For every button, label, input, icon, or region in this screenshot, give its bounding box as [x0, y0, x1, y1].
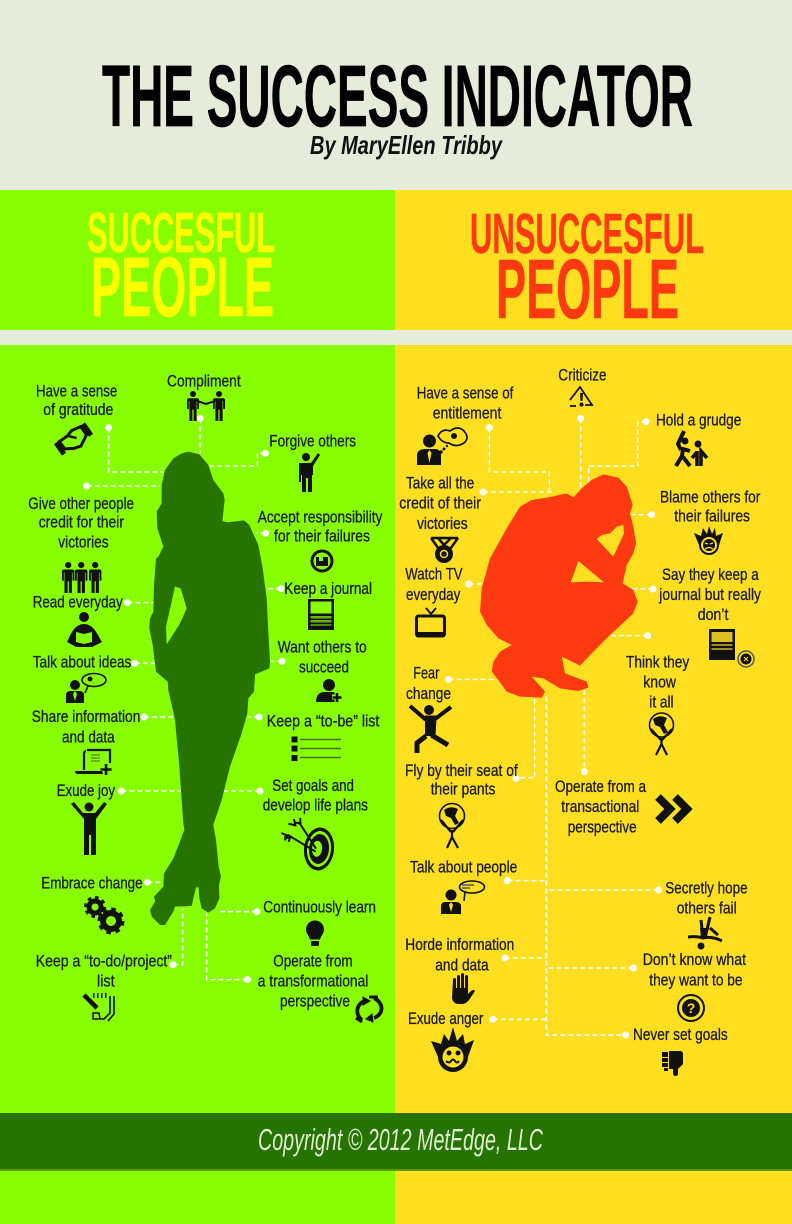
byline: By MaryEllen Tribby — [310, 130, 503, 160]
text: watch tv everyday: everyday — [406, 586, 461, 604]
text: think they know it all: it all — [649, 694, 674, 712]
text: want others to succeed — [278, 638, 367, 676]
text: embrace change: Embrace change — [41, 874, 143, 892]
text: take all the credit: credit of their — [399, 495, 481, 513]
text: watch tv everyday: Watch TV — [405, 565, 463, 583]
text: share information and data: and data — [62, 728, 115, 746]
text: continuously learn: Continuously learn — [263, 899, 376, 917]
text: share information and data: Share information — [32, 708, 140, 726]
icon: notepad with pencil — [84, 993, 114, 1021]
text: operate from a transformational perspective: Operate from — [273, 953, 353, 971]
text: blame others: their failures — [674, 508, 750, 526]
icon: three people — [62, 562, 101, 593]
labels: unsuccessful side — [399, 367, 762, 1044]
text: accept responsibility — [258, 509, 383, 546]
heading: successful people: SUCCESFUL — [87, 201, 275, 265]
text: accept responsibility: for their failures — [274, 528, 370, 546]
text: share information and data — [32, 708, 140, 746]
text: have a sense of entitlement — [417, 384, 514, 422]
text: fear change: Fear — [413, 665, 440, 683]
icon: person talking — [441, 881, 484, 914]
text: never set goals: Never set goals — [633, 1026, 728, 1044]
text: don't know what they want to be: they want to be — [649, 971, 743, 989]
text: think they know it all — [626, 653, 690, 712]
footer copyright text: Copyright © 2012 MetEdge, LLC — [258, 1122, 543, 1157]
header panel — [0, 0, 792, 190]
connectors: successful side — [83, 415, 285, 983]
text: have a sense of entitlement: Have a sense of — [417, 384, 514, 402]
icon: medal — [431, 538, 458, 563]
icon: thinking person — [417, 428, 467, 465]
text: give other people credit: victories — [58, 534, 109, 552]
icon: falling person — [688, 917, 722, 950]
icon: angry face — [694, 526, 723, 555]
text: exude anger: Exude anger — [408, 1010, 484, 1028]
text: don't know what they want to be: Don’t know what — [643, 951, 746, 969]
text: forgive others: Forgive others — [269, 433, 356, 451]
footer band — [0, 1113, 792, 1171]
panel: successful people heading background — [0, 190, 395, 330]
text: criticize: Criticize — [558, 367, 607, 385]
silhouette: standing woman — [149, 452, 270, 925]
text: fly by their seat — [405, 762, 518, 798]
text: operate from a transformational perspective: perspective — [280, 993, 350, 1011]
icon: journal — [308, 599, 334, 630]
icon: person with idea — [66, 674, 106, 703]
icon: angry face large — [431, 1027, 474, 1072]
text: operate from a transformational perspective: a transformational — [258, 973, 368, 991]
heading: successful people: PEOPLE — [91, 240, 274, 334]
icon: refresh cycle — [356, 997, 382, 1022]
text: watch tv everyday — [405, 565, 463, 604]
labels: successful side — [28, 373, 383, 1011]
text: keep a to-do/project list: Keep a “to-do/project” — [36, 953, 172, 971]
icon: warning triangle — [570, 387, 592, 406]
text: give other people credit: credit for their — [39, 514, 124, 532]
text: fly by their seat: Fly by their seat of — [405, 762, 518, 780]
icon: atlas holding globe — [650, 713, 674, 755]
icon: add person — [316, 679, 342, 702]
text: give other people credit — [28, 495, 134, 552]
text: keep a to-be list: Keep a “to-be” list — [267, 713, 380, 731]
text: think they know it all: know — [643, 673, 676, 691]
icon: scroll with plus — [75, 750, 112, 775]
text: secretly hope others fail: others fail — [677, 899, 737, 917]
heading: successful people — [87, 201, 275, 334]
icon: person pointing — [299, 453, 320, 492]
connectors: unsuccessful side — [445, 415, 662, 1038]
icon: atlas holding globe 2 — [440, 804, 464, 848]
text: blame others: Blame others for — [660, 488, 761, 506]
text: think they know it all: Think they — [626, 653, 690, 671]
panel: successful people body — [0, 345, 395, 1224]
text: fear change: change — [406, 685, 451, 703]
icon: target with arrows — [278, 816, 337, 872]
text: say they keep a journal — [658, 566, 762, 624]
text: have a sense of gratitude: of gratitude — [43, 401, 113, 419]
text: read everyday: Read everyday — [33, 593, 123, 611]
icon: handshake — [53, 422, 95, 458]
text: fly by their seat: their pants — [431, 780, 495, 798]
text: horde information and data: Horde information — [405, 936, 514, 954]
icon: open hand — [452, 973, 475, 1004]
icon: person reading — [67, 612, 102, 647]
text: say they keep a journal: journal but really — [658, 586, 762, 604]
silhouette: crouching man — [480, 474, 638, 698]
text: say they keep a journal: Say they keep a — [662, 566, 759, 584]
text: hold a grudge: Hold a grudge — [656, 411, 741, 429]
text: operate from a transactional perspective: transactional — [561, 798, 639, 816]
text: have a sense of gratitude: Have a sense — [36, 383, 117, 401]
text: set goals and develop life plans — [263, 777, 368, 815]
text: keep a to-do/project list — [36, 953, 172, 991]
text: blame others — [660, 488, 761, 526]
text: fear change — [406, 665, 451, 703]
text: compliment: Compliment — [167, 373, 241, 391]
text: talk about people: Talk about people — [410, 859, 517, 877]
icon: jumping person — [410, 705, 451, 753]
text: have a sense of gratitude — [36, 383, 117, 419]
text: operate from a transactional perspective: perspective — [568, 818, 637, 836]
text: don't know what they want to be — [643, 951, 746, 989]
icons: unsuccessful side — [410, 387, 754, 1076]
text: say they keep a journal: don’t — [698, 606, 729, 624]
icon: question mark: ? — [687, 1000, 695, 1016]
text: set goals and develop life plans: Set goals and — [272, 777, 354, 795]
icon: light bulb — [306, 920, 324, 946]
text: accept responsibility: Accept responsibility — [258, 509, 383, 527]
text: operate from a transactional perspective: Operate from a — [555, 778, 647, 796]
text: take all the credit: Take all the — [406, 475, 474, 493]
text: exude joy: Exude joy — [57, 782, 116, 800]
text: have a sense of entitlement: entitlement — [433, 404, 502, 422]
icons: successful side — [53, 391, 381, 1022]
text: keep a journal: Keep a journal — [284, 580, 372, 598]
text: secretly hope others fail — [665, 879, 748, 917]
panel: unsuccessful people heading background — [395, 190, 792, 330]
icon: thumbs down — [662, 1051, 683, 1076]
icon: straight face — [312, 551, 332, 571]
text: keep a to-do/project list: list — [97, 973, 115, 991]
text: secretly hope others fail: Secretly hope — [665, 879, 748, 897]
text: operate from a transformational perspective — [258, 953, 368, 1011]
icon: television — [416, 608, 445, 637]
icon: two people shaking hands — [187, 391, 225, 421]
text: take all the credit — [399, 475, 481, 533]
icon: question mark — [678, 995, 704, 1021]
text: horde information and data: and data — [435, 956, 489, 974]
text: horde information and data — [405, 936, 514, 974]
heading: unsuccessful people — [470, 202, 704, 336]
text: want others to succeed: Want others to — [278, 638, 367, 656]
panel: unsuccessful people body — [395, 345, 792, 1224]
icon: fighters — [676, 431, 707, 466]
icon: double chevron — [658, 797, 687, 821]
icon: joyful person — [71, 802, 107, 855]
text: give other people credit: Give other people — [28, 495, 134, 513]
icon: checklist — [292, 736, 341, 761]
icon: journal with cross — [709, 629, 754, 667]
text: set goals and develop life plans: develop life plans — [263, 797, 368, 815]
text: take all the credit: victories — [417, 515, 468, 533]
text: talk about ideas: Talk about ideas — [33, 654, 131, 672]
text: want others to succeed: succeed — [299, 658, 349, 676]
text: operate from a transactional perspective — [555, 778, 647, 836]
icon: gears — [86, 898, 123, 933]
